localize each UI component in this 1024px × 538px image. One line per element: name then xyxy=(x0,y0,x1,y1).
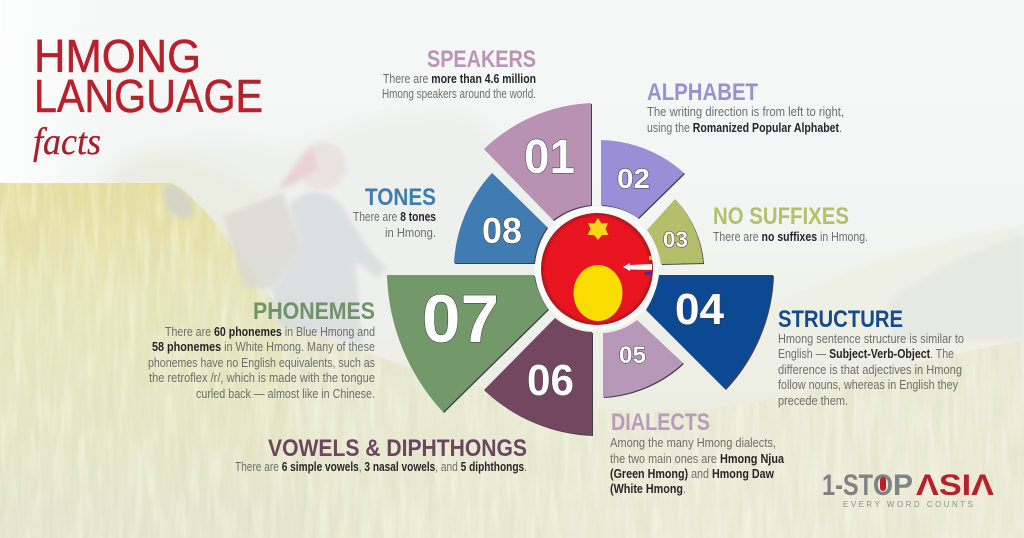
block: dialects: (White Hmong. xyxy=(610,482,686,496)
block: phonemes: curled back — almost like in Chinese. xyxy=(196,387,375,401)
block: dialects: Among the many Hmong dialects, xyxy=(610,436,776,450)
block: alphabet: ALPHABET xyxy=(647,79,758,106)
title xyxy=(33,30,263,163)
block: speakers: SPEAKERS xyxy=(427,46,536,73)
block: structure: STRUCTURE xyxy=(778,306,903,333)
block: dialects: DIALECTS xyxy=(611,409,710,436)
segment 06 xyxy=(484,318,592,435)
logo: 1-Stop Asia xyxy=(822,469,994,509)
block: phonemes: PHONEMES xyxy=(253,298,375,325)
block: structure xyxy=(778,306,964,408)
block: alphabet: using the Romanized Popular Alphabet. xyxy=(647,121,842,135)
logo: 1-Stop Asia: ΛSIΛ xyxy=(916,469,994,502)
background figure: farmer with basket xyxy=(223,142,386,345)
segment 04: 04 xyxy=(675,285,725,334)
segment 04 xyxy=(646,275,773,389)
segment 07: 07 xyxy=(422,281,499,357)
logo: 1-Stop Asia: 1-ST xyxy=(822,469,873,502)
segment 01: 01 xyxy=(524,131,575,184)
block: phonemes: the retroflex /r/, which is made with the tongue xyxy=(149,371,375,385)
segment 08 xyxy=(454,173,547,263)
block: structure: follow nouns, whereas in English they xyxy=(778,378,959,392)
segment 06: 06 xyxy=(527,356,574,405)
block: no suffixes: There are no suffixes in Hmong. xyxy=(713,230,868,244)
block: alphabet xyxy=(647,79,844,135)
title: facts xyxy=(33,121,101,163)
block: tones: in Hmong. xyxy=(385,226,436,240)
block: phonemes xyxy=(148,298,375,401)
block: dialects xyxy=(610,409,785,496)
segment 02: 02 xyxy=(617,163,650,194)
block: structure: difference is that adjectives in Hmong xyxy=(778,363,962,377)
block: no suffixes: NO SUFFIXES xyxy=(713,203,849,230)
wheel diagram xyxy=(387,103,773,435)
block: dialects: the two main ones are Hmong Njua xyxy=(610,452,785,466)
block: vowels and diphthongs: There are 6 simple vowels, 3 nasal vowels, and 5 diphthongs. xyxy=(235,460,527,474)
block: alphabet: The writing direction is from left to right, xyxy=(647,105,844,119)
logo: 1-Stop Asia: O xyxy=(873,469,893,502)
block: phonemes: phonemes have no English equivalents, such as xyxy=(148,356,375,370)
block: structure: Hmong sentence structure is similar to xyxy=(778,332,964,346)
segment 03: 03 xyxy=(663,227,688,252)
block: speakers xyxy=(382,46,536,101)
segment 08: 08 xyxy=(482,210,522,251)
segment 05: 05 xyxy=(619,342,646,369)
block: tones: There are 8 tones xyxy=(353,210,436,224)
segment 05 xyxy=(603,320,683,397)
block: phonemes: There are 60 phonemes in Blue Hmong and xyxy=(165,325,375,339)
segment 02 xyxy=(601,140,684,218)
block: structure: English — Subject-Verb-Object. The xyxy=(778,347,954,361)
centre flag badge xyxy=(535,207,659,331)
block: tones: TONES xyxy=(365,184,436,211)
segment 01 xyxy=(484,103,591,220)
block: vowels and diphthongs xyxy=(235,435,527,474)
title: LANGUAGE xyxy=(34,70,263,122)
block: phonemes: 58 phonemes in White Hmong. Many of these xyxy=(152,340,375,354)
block: tones xyxy=(353,184,436,240)
block: speakers: Hmong speakers around the world. xyxy=(382,87,536,101)
block: structure: precede them. xyxy=(778,394,848,408)
segment 03 xyxy=(647,199,703,264)
block: dialects: (Green Hmong) and Hmong Daw xyxy=(610,467,774,481)
segment 07 xyxy=(387,275,548,412)
block: speakers: There are more than 4.6 million xyxy=(383,72,536,86)
logo: 1-Stop Asia: P xyxy=(893,469,913,502)
block: vowels and diphthongs: VOWELS & DIPHTHONGS xyxy=(268,435,527,462)
block: no suffixes xyxy=(713,203,868,244)
logo: 1-Stop Asia: EVERY WORD COUNTS xyxy=(843,500,973,509)
title: HMONG xyxy=(34,30,201,82)
